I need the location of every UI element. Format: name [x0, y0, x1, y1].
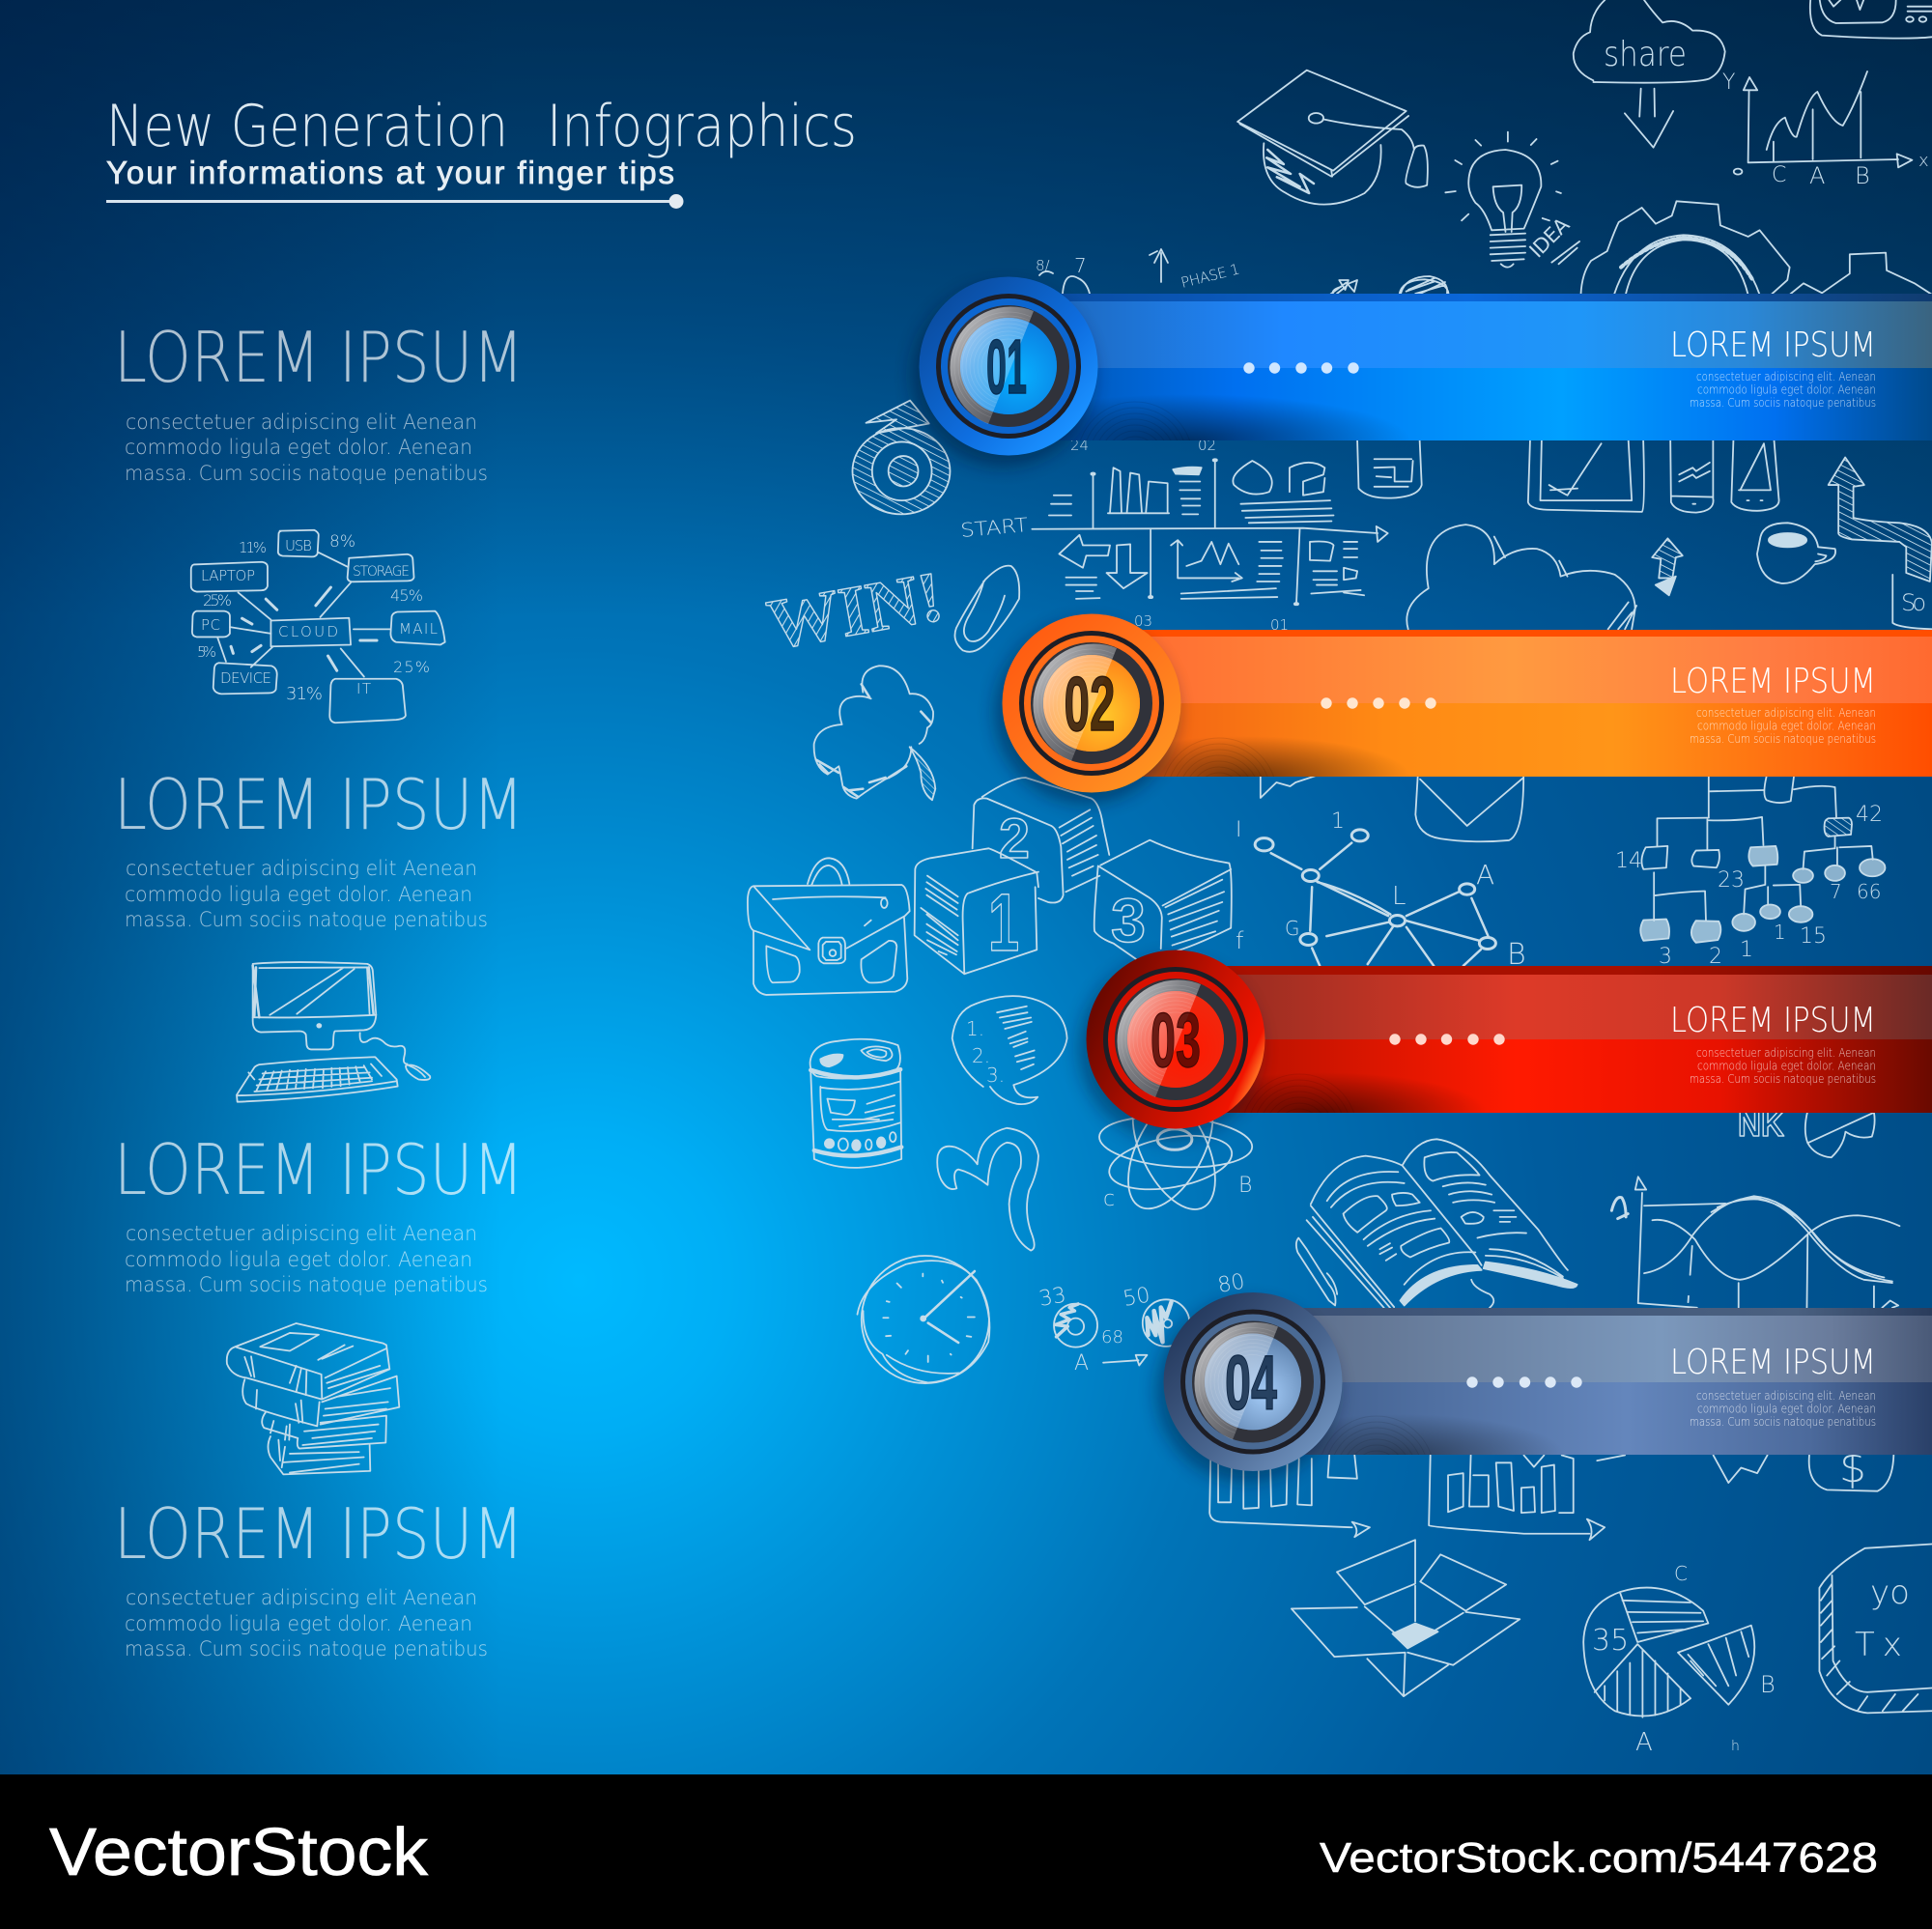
doodle: pie chart — [1583, 1562, 1776, 1757]
doodle: disks and percentages — [1037, 1269, 1247, 1376]
footer watermark band: VectorStock — [49, 1814, 429, 1889]
header title: New Generation — [106, 93, 508, 160]
left text block 2: consectetuer adipiscing elit Aenean — [126, 857, 477, 881]
doodle: cloud network diagram: MAIL — [399, 620, 438, 638]
doodle: hatched WIN text: WIN! — [762, 556, 949, 666]
doodle: start timeline chart: START — [959, 513, 1029, 542]
left text block 2: commodo ligula eget dolor. Aenean — [125, 883, 472, 907]
bar 04 text: commodo ligula eget dolor. Aenean — [1697, 1401, 1876, 1416]
left text block 4: consectetuer adipiscing elit Aenean — [126, 1586, 477, 1610]
doodle: number cubes — [915, 778, 1232, 974]
doodle: cloud network diagram: 25% — [393, 658, 430, 676]
bar 03 dots — [1389, 1034, 1505, 1045]
doodle: thought cloud — [814, 666, 935, 800]
doodle: tablet bottom right — [1819, 1545, 1932, 1713]
left text block 1: massa. Cum sociis natoque penatibus — [125, 462, 488, 486]
bar 02 text — [1670, 662, 1876, 746]
doodle: tablet top right corner — [1330, 0, 1932, 295]
doodle: start timeline chart: 02 — [1198, 437, 1216, 454]
bar 01 blue — [1059, 294, 1932, 440]
doodle: cloud network diagram: 8% — [329, 532, 355, 552]
left text block 3: consectetuer adipiscing elit Aenean — [126, 1222, 477, 1246]
footer watermark band — [0, 1774, 1932, 1929]
doodle: graduation cap — [1237, 71, 1428, 205]
doodle: line chart top right: A — [1809, 162, 1825, 189]
left text block 1: commodo ligula eget dolor. Aenean — [125, 436, 472, 460]
doodle: clock — [857, 1256, 989, 1383]
bar 04 text: consectetuer adipiscing elit. Aenean — [1696, 1388, 1876, 1403]
doodle: spiral target — [852, 401, 950, 514]
doodle: network graph: 1 — [1331, 809, 1345, 834]
doodle: gears — [1580, 201, 1932, 295]
doodle: org chart tree: 1 — [1774, 921, 1786, 944]
doodle: big cloud — [1406, 525, 1636, 629]
doodle: area above bars, phase notes: 8/ — [1036, 257, 1050, 274]
doodle: line chart top right — [1722, 71, 1929, 189]
header title: Infographics — [547, 93, 857, 160]
doodle: org chart tree — [1615, 776, 1885, 969]
bar 04 text: massa. Cum sociis natoque penatibus — [1690, 1414, 1876, 1429]
doodle: cloud network diagram: 11% — [239, 539, 267, 556]
left text block 4: commodo ligula eget dolor. Aenean — [125, 1612, 472, 1636]
bar 04 dots — [1466, 1376, 1582, 1388]
bar 03 text: LOREM IPSUM — [1670, 1001, 1876, 1040]
doodle: start timeline chart: 24 — [1070, 437, 1089, 454]
doodle: cloud network diagram: LAPTOP — [201, 567, 255, 584]
bar 03 text — [1670, 1001, 1876, 1086]
left text block 3 — [114, 1129, 524, 1297]
doodle: pie chart: 35 — [1592, 1624, 1629, 1658]
left text block 2: massa. Cum sociis natoque penatibus — [125, 908, 488, 932]
doodle: org chart tree: 14 — [1615, 849, 1642, 873]
badge 03 — [1079, 950, 1265, 1140]
doodle: cloud network diagram: 31% — [286, 684, 323, 704]
doodle: open book — [1296, 1139, 1577, 1308]
doodle: line chart top right: B — [1855, 162, 1870, 189]
doodle: org chart tree: 2 — [1709, 945, 1722, 969]
doodle: open box — [1292, 1540, 1520, 1696]
doodle: number cubes: 1 — [988, 877, 1019, 968]
doodle: org chart tree: 7 — [1830, 880, 1842, 903]
doodle: start timeline chart: 01 — [1270, 616, 1289, 634]
doodle: money icon: $ — [1839, 1443, 1866, 1492]
badge 04 — [1156, 1292, 1343, 1482]
doodle: start timeline chart: 03 — [1134, 612, 1152, 630]
doodle: cloud network diagram: IT — [356, 680, 371, 697]
doodle: atom: B — [1238, 1174, 1252, 1198]
doodle: cloud network diagram: 45% — [390, 586, 423, 605]
badge 01: 01 — [986, 324, 1027, 410]
doodle: org chart tree: 66 — [1857, 880, 1881, 903]
doodle: cloud network diagram: PC — [201, 616, 220, 634]
bar 04 slate — [1303, 1308, 1932, 1455]
doodle: area above bars, phase notes: PHASE 1 — [1179, 260, 1241, 292]
doodle: cloud network diagram: CLOUD — [278, 623, 338, 640]
doodle: pie chart: A — [1635, 1728, 1653, 1757]
doodle: start timeline chart — [959, 437, 1388, 634]
doodle: area above bars, phase notes — [1036, 249, 1447, 294]
badge 04: 04 — [1225, 1339, 1277, 1426]
doodle: wave chart: NK — [1738, 1104, 1784, 1144]
bar 04 text — [1670, 1343, 1876, 1429]
doodle: number cubes: 2 — [999, 808, 1030, 870]
doodle: paperclip — [954, 566, 1019, 652]
doodle: network graph: G — [1285, 917, 1300, 940]
doodle: mobile devices row — [1357, 440, 1779, 513]
left text block 3: LOREM IPSUM — [114, 1129, 524, 1210]
bar 03 text: massa. Cum sociis natoque penatibus — [1690, 1071, 1876, 1086]
doodle: cloud network diagram — [191, 530, 445, 723]
doodle: mail envelope — [1261, 776, 1523, 841]
badge 02: 02 — [1065, 661, 1115, 747]
doodle: number cubes: 3 — [1111, 886, 1146, 955]
doodle: disks and percentages: 80 — [1216, 1269, 1247, 1298]
doodle: tin can — [810, 1039, 901, 1168]
bar 03 text: commodo ligula eget dolor. Aenean — [1697, 1059, 1876, 1072]
doodle: atom — [1097, 1075, 1254, 1222]
bar 01 text: consectetuer adipiscing elit. Aenean — [1696, 369, 1876, 383]
doodle: cloud network diagram: 5% — [197, 643, 216, 661]
header title — [106, 93, 857, 209]
bar 03 text: consectetuer adipiscing elit. Aenean — [1696, 1045, 1876, 1060]
left text block 2: LOREM IPSUM — [114, 764, 524, 845]
header title: Your informations at your finger tips — [106, 155, 674, 190]
left text block 2 — [114, 764, 524, 932]
doodle: org chart tree: 3 — [1659, 945, 1672, 969]
doodle: disks and percentages: A — [1074, 1351, 1089, 1376]
doodle: org chart tree: 42 — [1856, 803, 1883, 827]
doodle: line chart top right: x — [1918, 151, 1929, 171]
bar 02 text: LOREM IPSUM — [1670, 662, 1876, 701]
bar 02 dots — [1321, 697, 1436, 709]
bar 02 text: massa. Cum sociis natoque penatibus — [1690, 731, 1876, 746]
bar 03 red — [1227, 966, 1932, 1113]
doodle: network graph — [1236, 809, 1526, 972]
left text block 4: LOREM IPSUM — [114, 1493, 524, 1574]
badge 01 — [912, 276, 1097, 467]
doodle: tablet bottom right: yo — [1870, 1574, 1910, 1612]
bar 01 text — [1670, 326, 1876, 410]
bar 04 text: LOREM IPSUM — [1670, 1343, 1876, 1382]
bar 01 text: massa. Cum sociis natoque penatibus — [1690, 395, 1876, 410]
doodle: network graph: f — [1236, 927, 1244, 954]
doodle: cloud network diagram: USB — [285, 537, 312, 554]
bar 01 dots — [1243, 362, 1359, 374]
doodle: numbered speech bubble: 3. — [986, 1064, 1005, 1087]
doodle: light bulb idea — [1445, 132, 1579, 268]
left text block 3: massa. Cum sociis natoque penatibus — [125, 1273, 488, 1297]
bar 02 text: commodo ligula eget dolor. Aenean — [1697, 719, 1876, 732]
doodle: share cloud with arrow: share — [1604, 35, 1687, 74]
doodle: org chart tree: 23 — [1718, 868, 1745, 893]
doodle: tablet bottom right: Tx — [1855, 1626, 1910, 1664]
left text block 4 — [114, 1493, 524, 1661]
doodle: numbered speech bubble: 2. — [972, 1044, 990, 1067]
doodle: disks and percentages: 50 — [1122, 1283, 1152, 1312]
doodle: pie chart: h — [1731, 1739, 1740, 1754]
left text block 1 — [114, 317, 524, 486]
footer watermark band: VectorStock.com/5447628 — [1320, 1834, 1878, 1882]
doodle: coffee cup and arrow: So — [1901, 589, 1926, 616]
bar 01 text: LOREM IPSUM — [1670, 326, 1876, 365]
doodle: area above bars, phase notes: 7 — [1074, 254, 1087, 277]
doodle: disks and percentages: 68 — [1101, 1327, 1123, 1347]
doodle: share cloud with arrow — [1574, 0, 1725, 148]
doodle: cloud network diagram: STORAGE — [353, 564, 410, 580]
doodle: stack of books — [227, 1323, 399, 1474]
doodle: atom: c — [1103, 1187, 1115, 1211]
doodle: cloud network diagram: DEVICE — [220, 669, 271, 687]
bar 02 orange — [1142, 630, 1932, 777]
doodle: numbered speech bubble — [952, 996, 1067, 1104]
doodle: cloud network diagram: 25% — [203, 591, 232, 610]
doodle: bar charts below bar four — [1209, 1456, 1893, 1540]
badge 03: 03 — [1151, 997, 1201, 1083]
doodle: network graph: A — [1476, 859, 1494, 891]
doodle: pie chart: B — [1760, 1671, 1776, 1698]
left text block 1: consectetuer adipiscing elit Aenean — [126, 411, 477, 435]
doodle: briefcase — [748, 858, 910, 995]
doodle: line chart top right: Y — [1722, 71, 1735, 95]
bar 01 text: commodo ligula eget dolor. Aenean — [1697, 383, 1876, 396]
left text block 3: commodo ligula eget dolor. Aenean — [125, 1248, 472, 1272]
doodle: pie chart: C — [1674, 1562, 1688, 1585]
bar 02 text: consectetuer adipiscing elit. Aenean — [1696, 705, 1876, 720]
doodle: org chart tree: 15 — [1800, 924, 1827, 949]
doodle: numbered speech bubble: 1. — [966, 1017, 984, 1040]
doodle: wave chart — [1611, 1104, 1899, 1308]
left text block 1: LOREM IPSUM — [114, 317, 524, 398]
doodle: network graph: I — [1236, 818, 1242, 842]
doodle: light bulb idea: IDEA — [1525, 213, 1575, 263]
badge 02 — [995, 614, 1180, 804]
doodle: disks and percentages: 33 — [1037, 1283, 1068, 1312]
doodle: network graph: L — [1392, 882, 1406, 911]
doodle: number three question mark shape — [937, 1128, 1038, 1251]
doodle: coffee cup and arrow — [1652, 457, 1932, 629]
left text block 4: massa. Cum sociis natoque penatibus — [125, 1637, 488, 1661]
doodle: line chart top right: C — [1772, 163, 1786, 187]
doodle: org chart tree: 1 — [1740, 938, 1753, 962]
doodle: network graph: B — [1507, 938, 1526, 972]
doodle: desktop computer — [237, 962, 430, 1102]
